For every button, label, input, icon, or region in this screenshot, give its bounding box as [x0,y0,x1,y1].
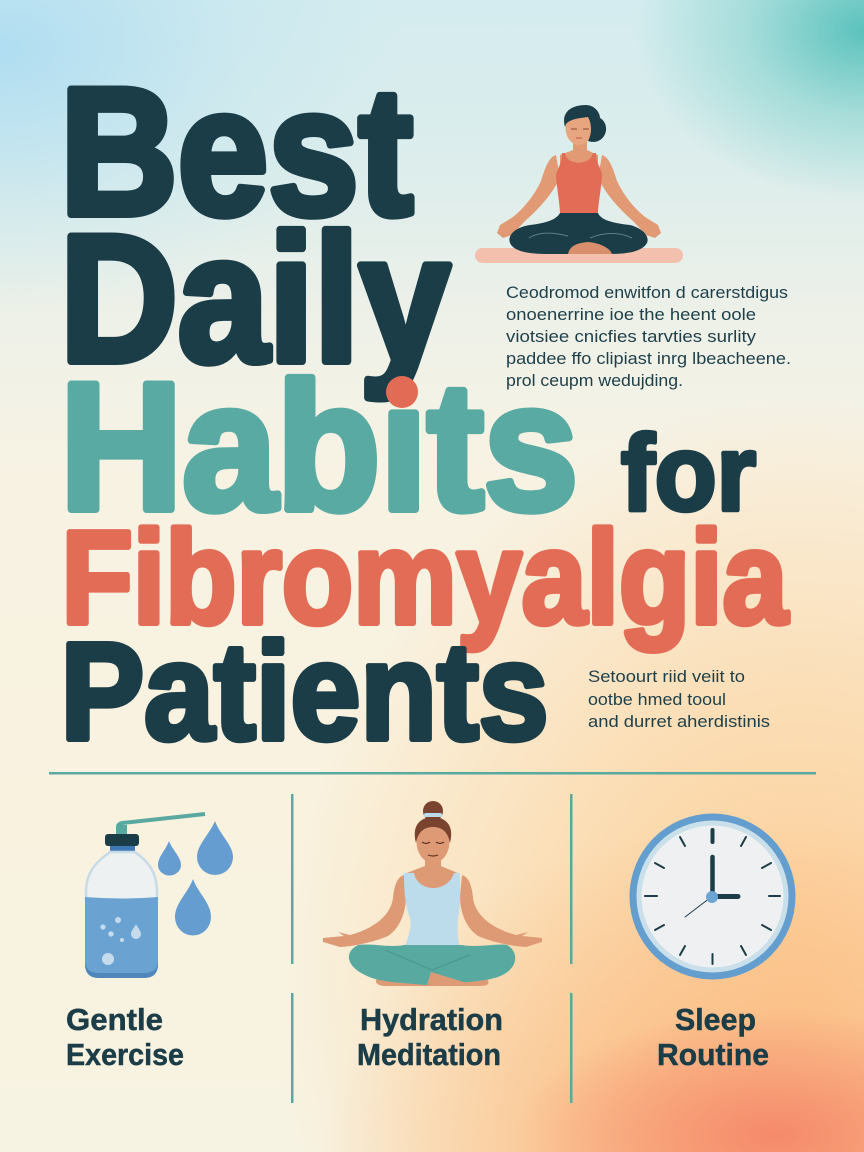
leg fold lines [529,233,632,238]
column label: Gentle Exercise: Gentle [66,1002,163,1037]
head [566,111,592,145]
crossed foot [427,972,470,985]
text block: description: Ceodromod enwitfon d carerstdigus [506,283,788,302]
head [416,821,450,863]
column label: Sleep Routine [657,1002,769,1072]
water [85,897,158,978]
legs [349,945,515,985]
closed eyes [571,128,589,130]
title accent dot [386,376,418,408]
crossed legs [509,213,648,254]
horizontal divider [49,772,816,774]
foot [568,242,612,254]
mat [475,248,683,263]
droplets [158,841,181,876]
title line: Best: Best [60,51,413,253]
title line: Habits: Habits [60,346,578,548]
title line: Fibromyalgia: Fibromyalgia [62,504,789,651]
title line: Patients: Patients [60,615,548,769]
column label: Sleep Routine: Routine [657,1037,769,1072]
bottle glass [86,852,157,900]
text block: side note: and durret aherdistinis [588,712,770,731]
leg crease [385,950,470,970]
text block: description: prol ceupm wedujding. [506,371,683,390]
text block: description: viotsiee cnicfies tarvties surlity [506,327,757,346]
column label: Gentle Exercise [66,1002,184,1072]
neck and chest [560,135,598,180]
bun [423,801,443,821]
icon: clock [630,814,796,980]
tick marks [645,830,780,964]
vertical dividers [291,794,572,1103]
straw [118,814,205,835]
tank top [556,153,602,214]
title [60,51,789,769]
column label: Gentle Exercise: Exercise [66,1037,184,1072]
neck [110,846,135,853]
title line: for: for [621,412,756,533]
icon: water bottle with droplets [85,814,233,978]
neck [404,852,460,900]
hair [415,817,451,843]
arms [323,875,406,947]
column label: Sleep Routine: Sleep [675,1002,756,1037]
column label: Hydration Meditation: Meditation [357,1037,501,1072]
top [404,873,460,948]
title line: Daily: Daily [60,198,450,400]
hair [564,105,606,142]
text block: description: onoenerrine ioe the heent oole [506,305,756,324]
eyes and mouth [422,842,444,856]
arms [497,155,560,238]
text block: side note: Setoourt riid veiit to [588,667,745,686]
text block: description [506,283,791,390]
illustration: meditating woman [323,801,542,986]
feet [376,977,489,986]
column label: Hydration Meditation [357,1002,503,1072]
column label: Hydration Meditation: Hydration [360,1002,503,1037]
illustration: woman in lotus pose on mat [475,105,683,263]
clock hands [685,857,738,917]
text block: side note [588,667,770,731]
text block: description: paddee ffo clipiast inrg lbeacheene. [506,349,791,368]
text block: side note: ootbe hmed tooul [588,690,726,709]
cap [105,834,139,846]
bubbles [100,917,141,965]
